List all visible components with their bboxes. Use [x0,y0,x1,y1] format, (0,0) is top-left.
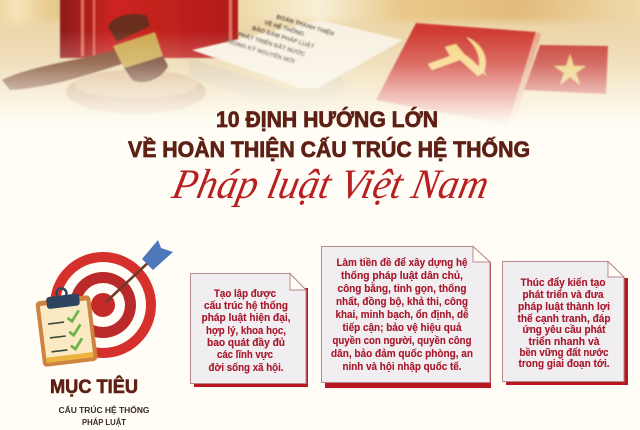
text: Mục tiêu subtitle: PHÁP LUẬT [82,416,127,427]
card 2 text: tiếp cận; bảo vệ hiệu quả [342,322,462,334]
subtitle script: Pháp luật Việt Nam [167,161,493,208]
text: Mục tiêu subtitle: CẤU TRÚC HỆ THỐNG [58,404,150,415]
card 2 text: nhất, đồng bộ, khả thi, công [336,296,468,308]
target icon with clipboard [34,240,173,367]
card 3 text: phát triển và đưa [522,289,604,301]
icon: Vietnamese flag book [524,45,608,94]
card 2 text: dân, bảo đảm quốc phòng, an [331,348,473,360]
icon: open document with text: TRONG KỶ NGUYÊN MỚI [224,37,296,66]
icon: target [50,252,156,358]
icon: open document with text: PHÁT TRIỂN ĐẤT NƯỚC [237,30,307,58]
card 2 text [331,257,473,373]
card 1 text: hợp lý, khoa học, [206,325,286,337]
title: 10 ĐỊNH HƯỚNG LỚN [216,107,438,132]
card 1 text: các lĩnh vực [217,349,273,361]
card 3 text: pháp luật thành lợi [518,301,610,313]
card 1 text: cấu trúc hệ thống [204,300,288,312]
title: VỀ HOÀN THIỆN CẤU TRÚC HỆ THỐNG [128,136,530,162]
panel: card 2 [322,246,491,388]
card 2 text: ninh và hội nhập quốc tế. [342,361,462,373]
icon: arrow [106,240,173,302]
icon: open document with text: ĐOÀN THANH THIỆN [276,13,335,38]
card 3 text [518,277,611,370]
header illustration: gavel, law book, constitution and flag [0,0,640,150]
card 2 text: quyền con người, quyền công [332,335,472,347]
card 1 text: bao quát đầy đủ [207,337,285,349]
card 2 text: công bằng, tinh gọn, thống [338,282,466,295]
card 2 text: khai, minh bạch, ổn định, dễ [336,308,468,321]
card 3 text: bền vững đất nước [520,347,608,359]
card 2 text: thống pháp luật dân chủ, [341,270,463,282]
icon: clipboard [34,285,98,367]
card 3 text: ứng yêu cầu phát [522,324,606,336]
card 3 text: trong giai đoạn tới. [518,358,610,370]
card 1 text: đời sống xã hội. [208,362,284,374]
icon: gavel [2,14,206,114]
card 3 text: triển nhanh và [528,336,600,348]
panel: card 3 [502,262,628,385]
heading: Mục tiêu: MỤC TIÊU [50,376,138,398]
icon: open document with text [188,0,403,114]
icon: open document with text: BẢO ĐẢM PHÁP LUẬT [251,25,315,51]
card 1 text: pháp luật hiện đại, [202,312,290,324]
card 3 text: thế cạnh tranh, đáp [518,313,611,325]
white fade overlay [0,0,640,150]
card 1 text [202,288,290,374]
icon: upright red book [60,0,238,58]
panel: card 1 [190,274,308,387]
card 3 text: Thúc đẩy kiến tạo [520,277,606,289]
title [128,107,530,208]
card 1 text: Tạo lập được [214,288,276,300]
icon: open document with text: VỀ HỆ THỐNG [263,18,306,38]
text: Mục tiêu subtitle [58,404,150,427]
icon: red book with hammer and sickle [376,23,541,125]
card 2 text: Làm tiền đề để xây dựng hệ [336,257,468,269]
